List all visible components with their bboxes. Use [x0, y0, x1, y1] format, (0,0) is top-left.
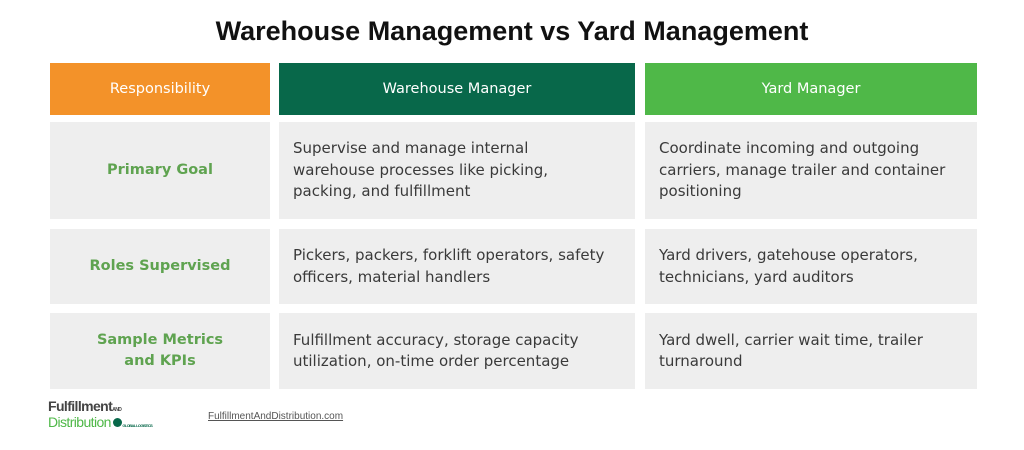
title: Warehouse Management vs Yard Management [216, 16, 808, 46]
header: responsibility [50, 63, 270, 115]
cell: yard metrics: turnaround [659, 352, 743, 370]
cell: warehouse metrics: utilization, on-time order percentage [293, 352, 569, 370]
header: yard manager: Yard Manager [762, 81, 860, 97]
row label: primary goal: Primary Goal [107, 162, 213, 178]
cell: warehouse metrics: Fulfillment accuracy, storage capacity [293, 330, 579, 348]
cell: warehouse roles: Pickers, packers, forklift operators, safety [293, 246, 604, 264]
row label: metrics [50, 313, 270, 389]
cell: yard roles: Yard drivers, gatehouse operators, [659, 246, 918, 264]
cell: warehouse roles: officers, material handlers [293, 268, 490, 286]
cell: yard roles: technicians, yard auditors [659, 268, 854, 286]
cell: yard roles [645, 229, 977, 304]
row label: metrics: and KPIs [124, 353, 196, 369]
row label: roles supervised: Roles Supervised [89, 258, 230, 274]
footer url: FulfillmentAndDistribution.com [208, 411, 343, 422]
cell: yard metrics [645, 313, 977, 389]
cell: warehouse primary goal: warehouse processes like picking, [293, 161, 548, 179]
logo: FulfillmentAND [48, 398, 121, 414]
cell: warehouse primary goal: packing, and fulfillment [293, 182, 470, 200]
header: warehouse manager: Warehouse Manager [383, 81, 531, 97]
cell: warehouse primary goal: Supervise and manage internal [293, 139, 528, 157]
logo [48, 398, 153, 430]
cell: warehouse roles [279, 229, 635, 304]
row label: metrics: Sample Metrics [97, 332, 223, 348]
cell: yard metrics: Yard dwell, carrier wait time, trailer [659, 330, 923, 348]
cell: yard primary goal: carriers, manage trailer and container [659, 161, 945, 179]
row label: roles supervised [50, 229, 270, 304]
cell: warehouse metrics [279, 313, 635, 389]
header: warehouse manager [279, 63, 635, 115]
cell: warehouse primary goal [279, 122, 635, 219]
header: responsibility: Responsibility [110, 81, 210, 97]
logo: Distribution GLOBAL LOGISTICS [48, 414, 152, 430]
cell: yard primary goal: Coordinate incoming and outgoing [659, 139, 919, 157]
row label: primary goal [50, 122, 270, 219]
header: yard manager [645, 63, 977, 115]
cell: yard primary goal: positioning [659, 182, 742, 200]
cell: yard primary goal [645, 122, 977, 219]
